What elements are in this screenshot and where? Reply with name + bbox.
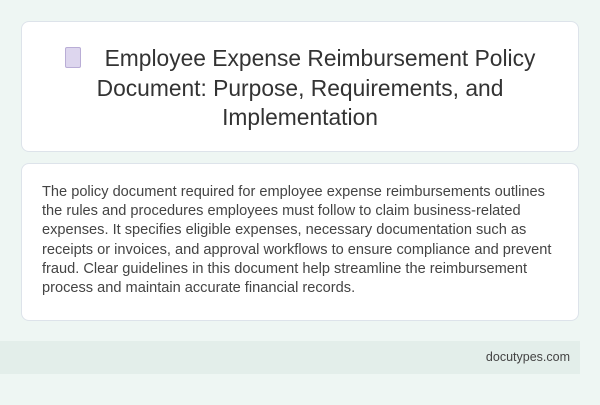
icon: document (65, 47, 81, 68)
text block: receipts or invoices, and approval workflows to ensure compliance and prevent (42, 242, 551, 258)
text block: fraud. Clear guidelines in this document help streamline the reimbursement (42, 261, 527, 277)
text block: The policy document required for employee expense reimbursements outlines (42, 184, 545, 200)
panel: description (21, 163, 579, 321)
text block (42, 184, 552, 296)
text block: the rules and procedures employees must follow to claim business-related (42, 203, 521, 219)
footer: docutypes.com (486, 350, 570, 364)
title: Employee Expense Reimbursement Policy Document: Purpose, Requirements, and Implementation (97, 45, 535, 130)
text block: expenses. It specifies eligible expenses, necessary documentation such as (42, 222, 526, 238)
footer (0, 341, 580, 374)
panel: title card (21, 21, 579, 152)
text block: process and maintain accurate financial records. (42, 280, 355, 296)
